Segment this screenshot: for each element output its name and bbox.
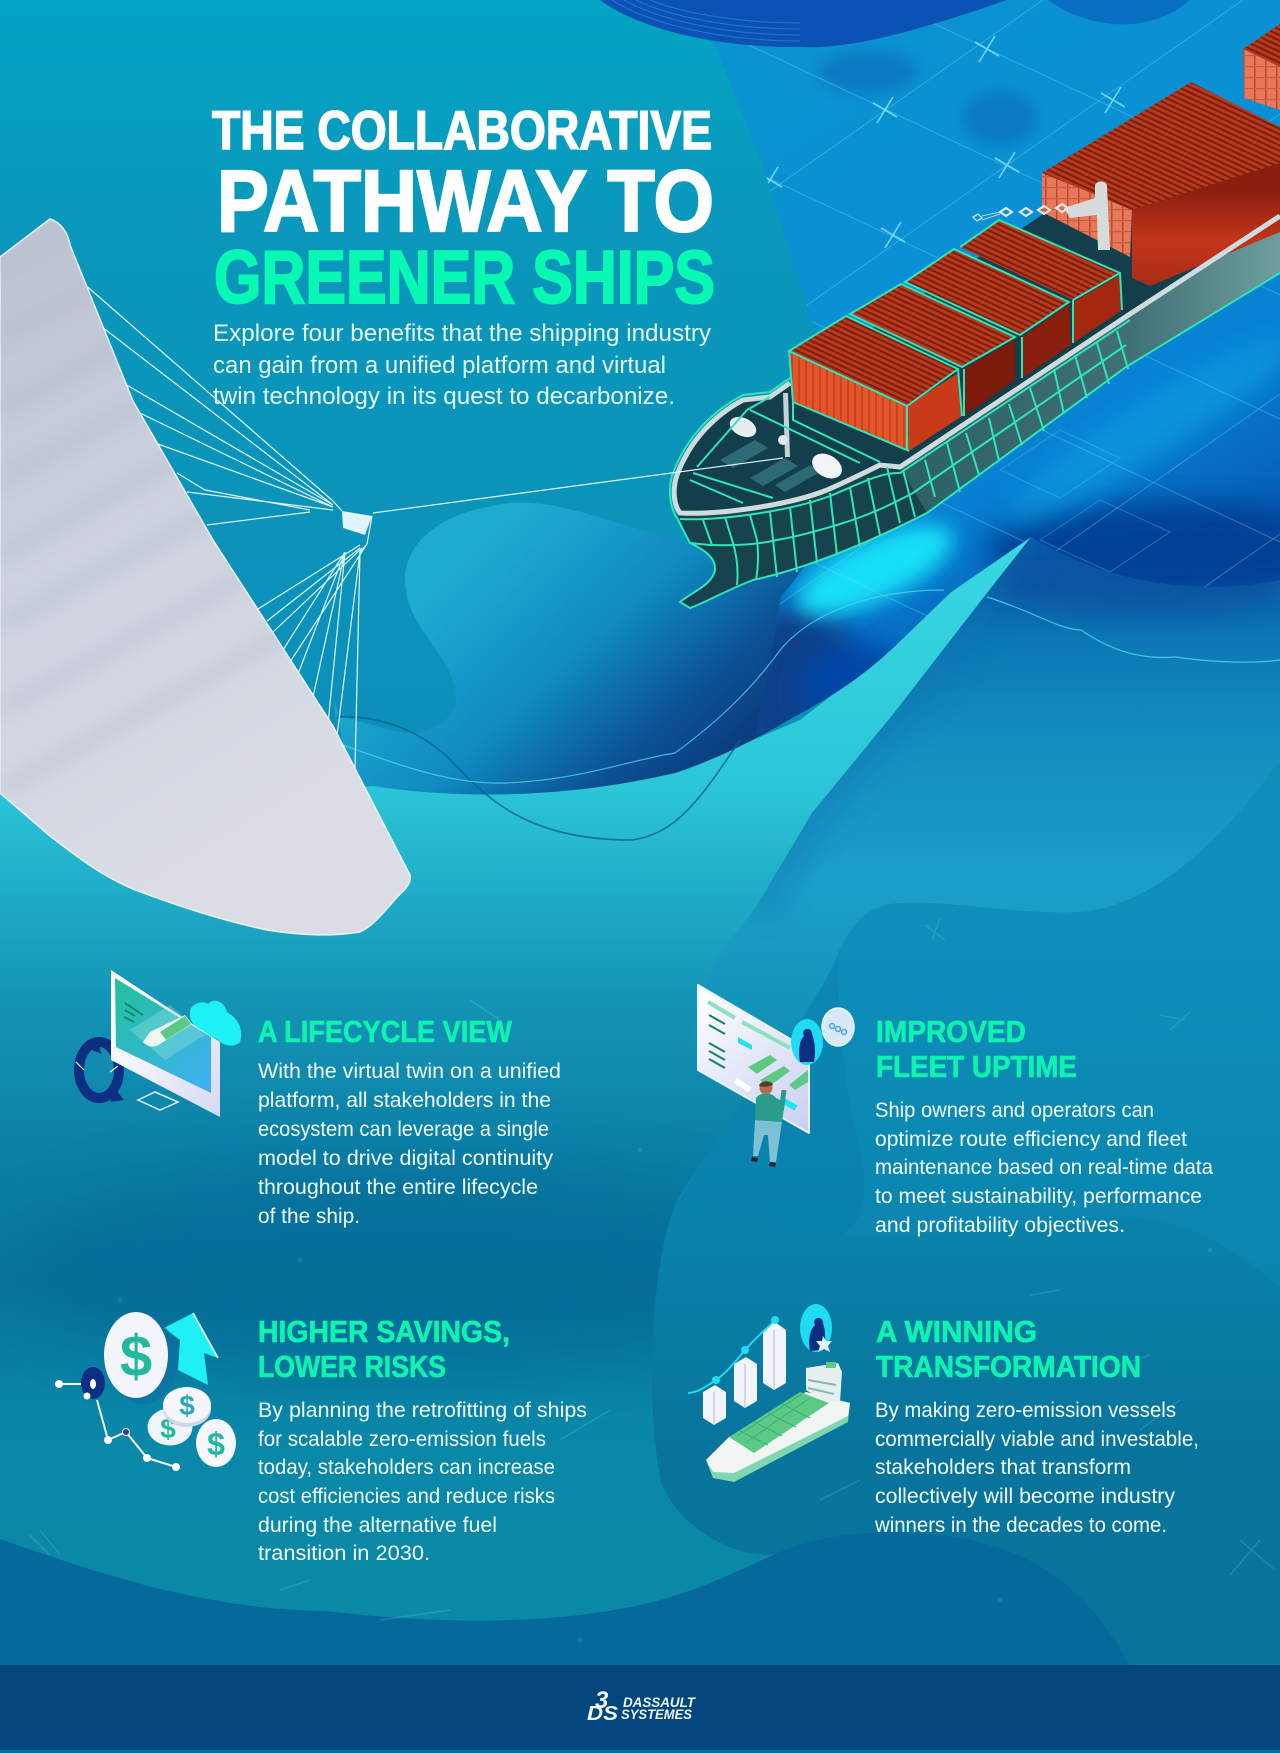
icon: dashboard with person	[698, 985, 854, 1167]
text: a winning transformation: By making zero-emission vessels	[875, 1399, 1176, 1422]
background: mid-right blob	[652, 1200, 1280, 1665]
container block 3	[905, 249, 1071, 378]
illustration: kite sail	[0, 219, 783, 935]
logo: Dassault Systemes: 3	[595, 1687, 609, 1714]
text: higher savings, lower risks	[258, 1399, 587, 1565]
icon: green ship	[706, 1362, 850, 1482]
hull far section	[900, 216, 1280, 513]
title	[212, 99, 715, 319]
icon: person	[751, 1081, 784, 1167]
background: upper teal area	[0, 0, 950, 790]
text: higher savings, lower risks: By planning the retrofitting of ships	[258, 1399, 587, 1422]
heading: a lifecycle view: A LIFECYCLE VIEW	[258, 1014, 513, 1049]
logo: Dassault Systemes: SYSTEMES	[621, 1707, 692, 1722]
text: a lifecycle view: throughout the entire lifecycle	[258, 1176, 538, 1199]
text: higher savings, lower risks: today, stakeholders can increase	[258, 1456, 555, 1479]
icon: monitor with ship and cloud	[76, 970, 241, 1117]
text: improved fleet uptime: Ship owners and operators can	[875, 1099, 1154, 1122]
text: a lifecycle view: ecosystem can leverage a single	[258, 1118, 549, 1141]
icon: dollar coins and arrow	[55, 1312, 236, 1471]
intro text	[213, 320, 711, 410]
text: improved fleet uptime	[875, 1099, 1213, 1237]
hull side	[680, 216, 1280, 608]
text: a lifecycle view: model to drive digital continuity	[258, 1147, 554, 1170]
container block 4	[960, 220, 1122, 343]
text: higher savings, lower risks: during the alternative fuel	[258, 1514, 497, 1537]
background: bottom dark wave	[0, 1532, 1130, 1665]
text: a winning transformation: collectively will become industry	[875, 1485, 1175, 1508]
icon: network nodes	[59, 1384, 176, 1467]
back container block	[1042, 24, 1280, 286]
text: higher savings, lower risks: for scalable zero-emission fuels	[258, 1428, 546, 1451]
icon: recycle ring	[76, 1040, 124, 1102]
footer band	[0, 1665, 1280, 1753]
kite fabric bands	[0, 226, 283, 788]
text: a winning transformation: stakeholders that transform	[875, 1456, 1131, 1479]
text: a lifecycle view: With the virtual twin on a unified	[258, 1060, 561, 1083]
hull wireframe	[670, 273, 1280, 608]
container block 1	[789, 316, 962, 451]
text: higher savings, lower risks: transition in 2030.	[258, 1542, 430, 1565]
icon: bars	[703, 1322, 786, 1425]
hull rail	[674, 216, 1280, 513]
icon: up arrow	[164, 1313, 218, 1385]
container block 2	[850, 284, 1015, 416]
text: improved fleet uptime: maintenance based on real-time data	[875, 1156, 1213, 1179]
decorative flow lines	[337, 590, 1280, 840]
icon: cloud	[190, 1001, 241, 1046]
intro text: twin technology in its quest to decarbonize.	[213, 383, 675, 410]
text: a winning transformation	[874, 1399, 1199, 1537]
text: higher savings, lower risks: cost efficiencies and reduce risks	[258, 1485, 555, 1508]
heading: improved fleet uptime	[876, 1014, 1077, 1084]
deck machinery	[720, 393, 846, 492]
heading: a winning transformation: TRANSFORMATION	[876, 1349, 1141, 1384]
illustration: container ship	[670, 24, 1280, 608]
icon: dollar coins and arrow: $	[120, 1324, 152, 1389]
faint background cross marks	[30, 918, 1275, 1642]
logo: Dassault Systemes	[587, 1687, 697, 1725]
icon: dollar coins and arrow: $	[160, 1413, 176, 1444]
kite control bar	[342, 511, 372, 535]
title: THE COLLABORATIVE	[212, 99, 712, 161]
intro text: Explore four benefits that the shipping industry	[213, 320, 711, 347]
icon: dollar coins and arrow: $	[207, 1426, 225, 1462]
background: right blue swell	[738, 537, 1280, 939]
title: GREENER SHIPS	[214, 235, 715, 319]
heading: higher savings, lower risks: HIGHER SAVINGS,	[258, 1314, 510, 1349]
icon: growth line	[688, 1320, 775, 1393]
heading: improved fleet uptime: FLEET UPTIME	[876, 1049, 1077, 1084]
background: sea with grid	[713, 0, 1280, 735]
icon: big coin	[109, 1316, 177, 1404]
icon: dollar coins and arrow: $	[179, 1390, 195, 1421]
title: PATHWAY TO	[217, 153, 714, 250]
heading: a winning transformation	[876, 1314, 1141, 1384]
text: a winning transformation: winners in the decades to come.	[874, 1514, 1167, 1537]
text: a lifecycle view: platform, all stakeholders in the	[258, 1089, 551, 1112]
intro text: can gain from a unified platform and virtual	[213, 352, 666, 379]
background: teardrop blob	[680, 960, 865, 1240]
kite rigging lines	[75, 276, 783, 817]
background: dark left band	[20, 1160, 780, 1380]
heading: improved fleet uptime: IMPROVED	[876, 1014, 1026, 1049]
kite canopy	[0, 219, 410, 935]
background: large rounded blob with outline	[652, 760, 1280, 1665]
icon: chat bubble	[822, 1008, 854, 1046]
text: improved fleet uptime: to meet sustainability, performance	[875, 1185, 1202, 1208]
icon: small coins	[148, 1409, 192, 1445]
heading: a winning transformation: A WINNING	[876, 1314, 1037, 1349]
text: a lifecycle view	[258, 1060, 561, 1228]
background: top wave with rings	[600, 0, 1190, 47]
icon: avatar	[791, 1019, 823, 1065]
icon: avatar with star	[800, 1304, 832, 1352]
ship deck	[673, 130, 1280, 608]
text: a lifecycle view: of the ship.	[258, 1205, 360, 1228]
icon: growth chart with ship	[688, 1304, 850, 1482]
crane and chain	[973, 182, 1110, 250]
text: improved fleet uptime: and profitability objectives.	[875, 1214, 1125, 1237]
text: improved fleet uptime: optimize route efficiency and fleet	[875, 1128, 1187, 1151]
logo: Dassault Systemes: DASSAULT	[623, 1695, 697, 1710]
heading: higher savings, lower risks	[258, 1314, 510, 1384]
heading: higher savings, lower risks: LOWER RISKS	[258, 1349, 446, 1384]
background: wave under ship with blob	[335, 503, 950, 795]
logo: Dassault Systemes: DS	[587, 1703, 619, 1725]
text: a winning transformation: commercially viable and investable,	[875, 1428, 1199, 1451]
